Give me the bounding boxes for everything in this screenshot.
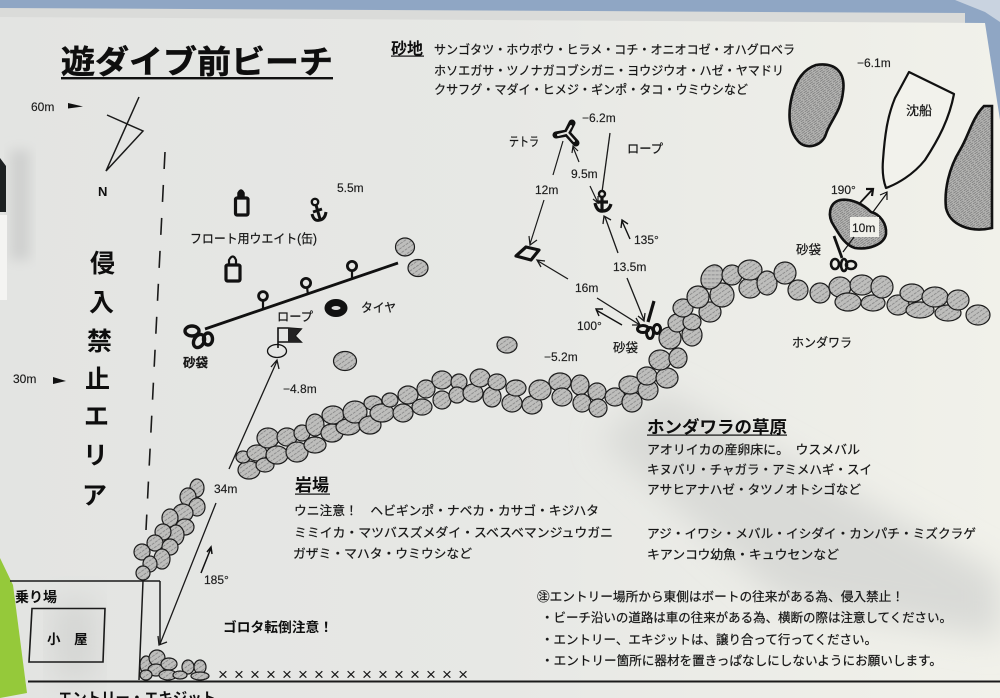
species list: ガザミ・マハタ・ウミウシなど [293, 547, 472, 561]
icon: sandbag right [831, 236, 856, 271]
no-entry area label: リ [83, 442, 108, 470]
icon: tire [324, 299, 348, 317]
icon: north arrow: N [98, 184, 107, 199]
label: 5.5m: 5.5m [337, 181, 364, 195]
no-entry area label [82, 250, 115, 510]
marker: 60m [31, 100, 83, 114]
arrow: 34m entry to buoy [158, 360, 279, 645]
shore and entry boxes [10, 581, 1000, 682]
icon: tetrapod [556, 123, 576, 143]
no-entry area label: 止 [85, 366, 110, 394]
label: sandbag right: 砂袋 [796, 243, 821, 257]
warning: loose rock: ゴロタ転倒注意！ [223, 619, 333, 635]
panel: sand species list [391, 40, 795, 97]
species list: アサヒアナハゼ・タツノオトシゴなど [647, 482, 861, 497]
dashed boundary line [146, 152, 165, 530]
arrow: 9.5m tetra to anchor [572, 146, 598, 203]
label: 185 degrees: 185° [204, 573, 229, 587]
icon: flag buoy [268, 328, 301, 358]
arrow: 13.5m [603, 216, 645, 321]
no-entry area label: 侵 [90, 250, 115, 278]
rock pile at entry [140, 650, 209, 680]
clip on left edge [0, 158, 7, 300]
no-entry area label: ア [82, 482, 107, 510]
species list [647, 443, 976, 562]
label: 100 degrees: 100° [577, 319, 602, 333]
rock reef: lower left chain [134, 479, 205, 580]
shipwreck [883, 72, 954, 188]
species list: ミミイカ・マツバスズメダイ・スベスベマンジュウガニ [294, 525, 613, 540]
label: tire: タイヤ [361, 301, 396, 315]
arrows: 190 degree bearing [843, 189, 887, 252]
icon: anchor right [595, 191, 611, 211]
label: 135 degrees: 135° [634, 233, 659, 247]
species list: キアンコウ幼魚・キュウセンなど [647, 548, 839, 562]
notes: ㊟エントリー場所から東側はボートの往来がある為、侵入禁止！ [537, 589, 904, 604]
marker: 60m: 60m [31, 100, 54, 114]
species list [293, 503, 613, 561]
rock formation: right edge [946, 106, 992, 229]
label: -4.8m: −4.8m [283, 382, 317, 396]
label: tetra: テトラ [509, 135, 539, 149]
species list: アオリイカの産卵床に。 ウスメバル [647, 443, 860, 457]
label: -6.2m: −6.2m [582, 111, 616, 125]
arrow: 100 degree bearing [596, 309, 622, 325]
building: hut: 屋 [74, 632, 88, 647]
icon: square weight [516, 247, 539, 260]
arrow: 135 degree bearing [621, 220, 630, 239]
notes [537, 589, 952, 668]
panel: seaweed meadow [647, 417, 976, 562]
building: hut [29, 608, 105, 662]
rope line with floats [205, 261, 398, 329]
notes: ・エントリー箇所に器材を置きっぱなしにしないようにお願いします。 [541, 653, 942, 668]
label: 13.5m: 13.5m [613, 260, 646, 274]
label: -6.1m: −6.1m [857, 56, 891, 70]
marker: 30m: 30m [13, 372, 36, 386]
icon: sandbag middle [638, 301, 660, 338]
icon: north arrow [98, 97, 143, 199]
rock formation: 10m rock [830, 200, 886, 248]
rock reef: main chain [236, 260, 990, 479]
species list lines: クサフグ・マダイ・ヒメジ・ギンポ・タコ・ウミウシなど [434, 82, 748, 97]
label: 34m: 34m [214, 482, 237, 496]
no-entry area label: エ [84, 403, 109, 431]
green object at lower left [0, 558, 27, 698]
arrow: 12m tetra to square [529, 141, 563, 245]
shipwreck: 沈船 [906, 103, 933, 118]
label: 9.5m: 9.5m [571, 167, 598, 181]
species list lines [434, 42, 795, 97]
label: sargassum: ホンダワラ [792, 335, 852, 350]
icon: sandbag left [185, 326, 212, 350]
label: -5.2m: −5.2m [544, 350, 578, 364]
arrow: rope to anchor [602, 133, 610, 192]
icon: float weight can top [236, 190, 248, 215]
species list: アジ・イワシ・メバル・イシダイ・カンパチ・ミズクラゲ [647, 526, 976, 541]
title: 遊ダイブ前ビーチ [61, 44, 333, 80]
label: 16m: 16m [575, 281, 598, 295]
label: rope left: ロープ [277, 310, 313, 324]
label: sandbag middle: 砂袋 [613, 341, 638, 355]
arrow: 185 degree bearing [201, 547, 212, 573]
no-entry area label: 禁 [87, 328, 112, 356]
icon: float weight can bottom [226, 256, 240, 281]
no-entry area label: 入 [89, 289, 114, 317]
heading: rocky area: 岩場 [295, 476, 329, 495]
species list lines: ホソエガサ・ツノナガコブシガニ・ヨウジウオ・ハゼ・ヤマドリ [434, 63, 784, 78]
label: sandbag left: 砂袋 [183, 355, 209, 370]
marker: 30m [13, 372, 66, 386]
icon: anchor left [312, 199, 326, 220]
species list: ウニ注意！ ヘビギンポ・ナベカ・カサゴ・キジハタ [294, 503, 599, 518]
scattered rocks [334, 238, 517, 370]
building: hut: 小 [47, 632, 61, 647]
label: boarding area: 乗り場 [15, 589, 57, 605]
fence crosses along the road: ×××××××××××××××× [218, 665, 468, 684]
label: 190 degrees: 190° [831, 183, 856, 197]
panel: rocky area [293, 476, 613, 561]
notes: ・ビーチ沿いの道路は車の往来がある為、横断の際は注意してください。 [541, 610, 952, 625]
rock formation: 10m rock: 10m [852, 221, 875, 235]
rock formation: top oval [790, 64, 843, 146]
label: float weight: フロート用ウエイト(缶) [190, 232, 317, 246]
notes: ・エントリー、エキジットは、譲り合って行ってください。 [541, 633, 877, 647]
arrow: 16m [537, 260, 640, 325]
heading: seaweed meadow: ホンダワラの草原 [647, 417, 787, 437]
label: 12m: 12m [535, 183, 558, 197]
label: rope right: ロープ [627, 142, 663, 156]
species list lines: サンゴタツ・ホウボウ・ヒラメ・コチ・オニオコゼ・オハグロベラ [434, 42, 795, 57]
heading: sand: 砂地 [391, 40, 423, 58]
species list: キヌバリ・チャガラ・アミメハギ・スイ [647, 463, 872, 477]
